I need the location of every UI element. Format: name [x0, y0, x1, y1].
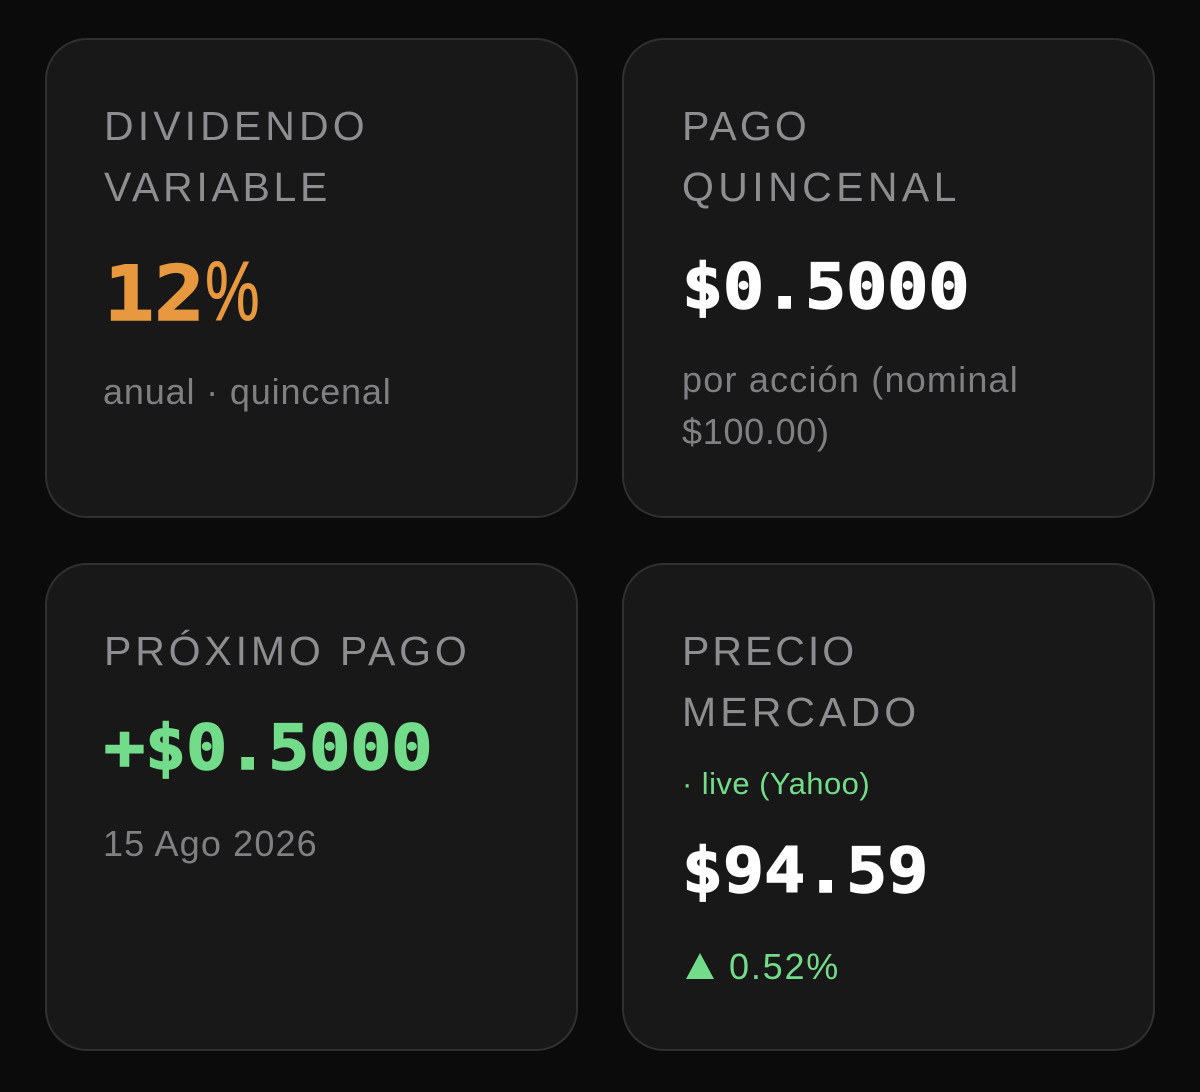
label: dividendo variable: VARIABLE	[104, 164, 331, 210]
value: $94.59: $94.59	[682, 834, 928, 907]
panel: pago quincenal	[622, 38, 1155, 518]
label: pago quincenal: QUINCENAL	[682, 164, 961, 210]
note: por accion	[682, 359, 1019, 452]
status: live yahoo: · live (Yahoo)	[682, 766, 870, 801]
label: precio mercado: PRECIO	[682, 628, 857, 674]
change: 0.52%: 0.52%	[729, 946, 840, 987]
value: $0.5000: $0.5000	[682, 250, 969, 323]
panel: precio mercado	[622, 563, 1155, 1051]
label: precio mercado: MERCADO	[682, 689, 920, 735]
value: 12%: %	[205, 244, 259, 338]
label: precio mercado	[682, 628, 920, 735]
note: por accion: $100.00)	[682, 411, 830, 452]
note: anual quincenal: anual · quincenal	[103, 371, 392, 412]
value: 12%	[104, 244, 259, 338]
value: +$0.5000: +$0.5000	[104, 711, 432, 784]
note: fecha: 15 Ago 2026	[103, 823, 318, 864]
note: por accion: por acción (nominal	[682, 359, 1019, 400]
label: dividendo variable	[104, 103, 369, 210]
panel: dividendo variable	[45, 38, 578, 518]
value: 12%: 12	[104, 249, 205, 338]
label: dividendo variable: DIVIDENDO	[104, 103, 369, 149]
label: proximo pago: PRÓXIMO PAGO	[104, 628, 471, 674]
panel: proximo pago	[45, 563, 578, 1051]
label: pago quincenal: PAGO	[682, 103, 810, 149]
label: pago quincenal	[682, 103, 961, 210]
